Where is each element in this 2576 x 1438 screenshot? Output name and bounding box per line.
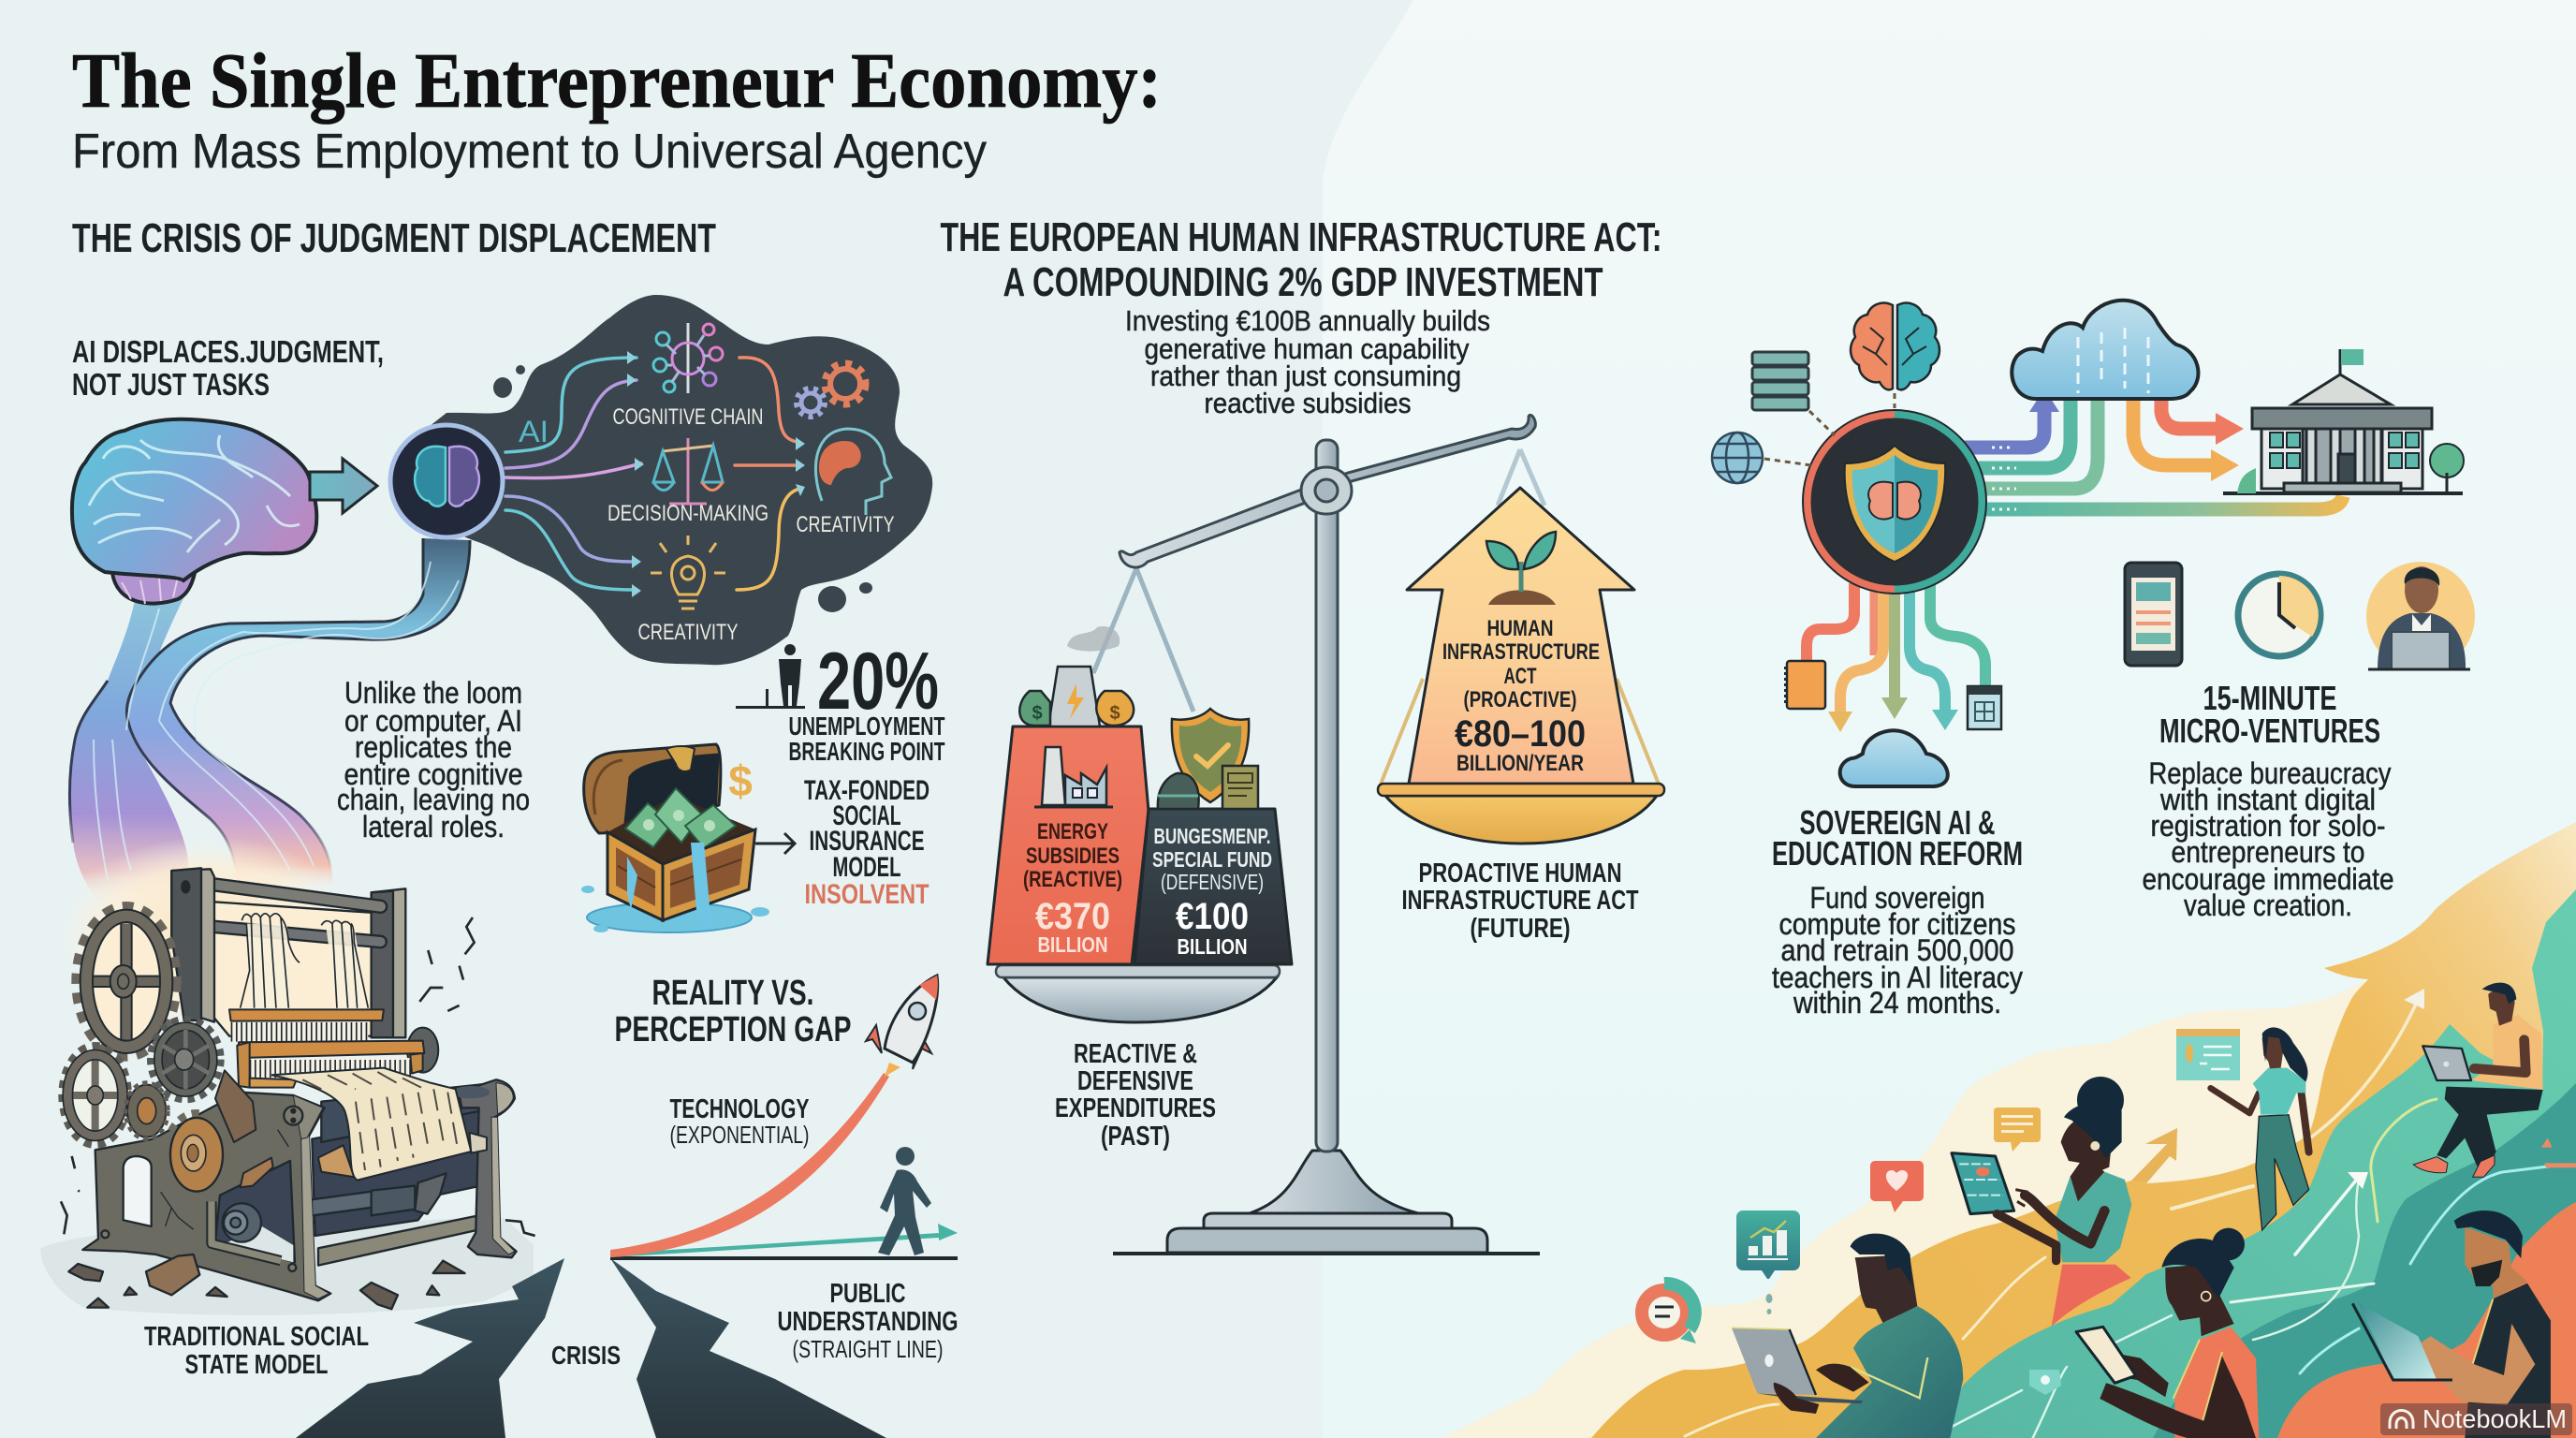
icon: light bulb xyxy=(651,536,725,609)
text: tax-funded social insurance model insolvent: TAX-FONDED xyxy=(804,775,929,806)
text: human infrastructure act: HUMAN xyxy=(1486,616,1554,641)
heading: 15-minute micro-ventures xyxy=(2159,679,2380,750)
hub circle with shield xyxy=(1803,410,1986,594)
left strings xyxy=(1093,568,1193,712)
label: proactive human infrastructure act: INFRASTRUCTURE ACT xyxy=(1402,886,1639,916)
text: human infrastructure act: €80–100 xyxy=(1455,713,1586,755)
cliff: left rock xyxy=(296,1258,564,1438)
section: 15-minute micro-ventures xyxy=(2125,562,2475,922)
icon: cloud bottom xyxy=(1840,730,1948,786)
connector lines xyxy=(505,351,805,597)
lower roller xyxy=(223,1203,261,1242)
text: sovereign AI body: within 24 months. xyxy=(1793,986,2001,1020)
reed and wood bars xyxy=(229,1009,438,1088)
icon: donut chat xyxy=(1642,1284,1696,1343)
heading: reality vs perception gap: PERCEPTION GAP xyxy=(614,1010,852,1049)
right leg xyxy=(459,1079,517,1257)
heading: 15-minute micro-ventures: MICRO-VENTURES xyxy=(2159,712,2380,750)
text: unlike the loom: replicates the xyxy=(355,730,512,764)
left pan xyxy=(996,965,1280,1022)
card: person badge xyxy=(2029,1370,2061,1395)
rear beam and under-cloth xyxy=(265,1083,496,1266)
heading: 15-minute micro-ventures: 15-MINUTE xyxy=(2203,679,2336,717)
person 2: woman with tablet xyxy=(1997,1077,2131,1327)
label: reactive defensive expenditures: (PAST) xyxy=(1101,1122,1170,1152)
icon: calculator xyxy=(1968,686,2001,729)
block: energy subsidies xyxy=(988,726,1149,964)
right pan xyxy=(1378,784,1664,844)
icon: cloud top xyxy=(2012,301,2198,399)
label: traditional social state model: STATE MODEL xyxy=(185,1350,328,1380)
heading: European Human Infrastructure Act: A COMPOUNDING 2% GDP INVESTMENT xyxy=(1003,259,1603,305)
label: reactive defensive expenditures: EXPENDITURES xyxy=(1055,1093,1216,1123)
scale pillar xyxy=(1316,440,1338,1152)
callout: AI displaces judgment: NOT JUST TASKS xyxy=(72,367,270,402)
icon: globe xyxy=(1712,433,1763,483)
text: sovereign AI body: compute for citizens xyxy=(1778,907,2016,941)
big gear xyxy=(77,907,176,1056)
text: micro-ventures body: Replace bureaucracy xyxy=(2149,756,2391,790)
dark blob: AI cognitive chain xyxy=(412,295,932,665)
text: energy subsidies: SUBSIDIES xyxy=(1026,844,1120,869)
text: energy subsidies: ENERGY xyxy=(1037,819,1108,844)
arrow heads xyxy=(2029,389,2244,481)
icon: factory xyxy=(1034,747,1113,807)
arrow: chest to model xyxy=(755,833,795,854)
icon: leaking treasure chest xyxy=(581,744,795,932)
text: public understanding: UNDERSTANDING xyxy=(777,1307,959,1337)
icon: leaking treasure chest: $ xyxy=(728,756,753,805)
icon: person at laptop xyxy=(2366,562,2475,670)
person 6: bearded man with laptop xyxy=(2352,1211,2551,1438)
text: decision-making: DECISION-MAKING xyxy=(607,501,768,526)
person 3: standing woman xyxy=(2211,1027,2309,1230)
text: cognitive chain: COGNITIVE CHAIN xyxy=(612,404,764,430)
rust chunks and cracks xyxy=(161,1070,288,1229)
callout: AI displaces judgment xyxy=(72,334,384,402)
cloth roller xyxy=(318,1086,490,1177)
balance scale xyxy=(988,415,1664,1254)
icon: sprout xyxy=(1486,532,1556,605)
heading: sovereign AI: EDUCATION REFORM xyxy=(1772,834,2023,873)
person 5: woman with phone xyxy=(2100,1228,2259,1438)
hill: cream xyxy=(1442,889,2576,1438)
intro text: investing 100B: generative human capability xyxy=(1144,332,1470,365)
text: unlike the loom: or computer, AI xyxy=(344,704,522,738)
text: energy subsidies: €370 xyxy=(1035,896,1110,937)
heading: European Human Infrastructure Act: THE EUROPEAN HUMAN INFRASTRUCTURE ACT: xyxy=(940,214,1662,260)
scale beam xyxy=(1120,415,1535,567)
text: unlike the loom: Unlike the loom xyxy=(344,676,522,710)
flow pipes to cloud and government building xyxy=(1956,379,2343,509)
icon: walking person xyxy=(878,1147,931,1255)
icon: servers xyxy=(1752,352,1808,410)
text: micro-ventures body: value creation. xyxy=(2184,888,2352,922)
text: tax-funded social insurance model insolvent: INSURANCE xyxy=(809,826,925,857)
middle gear xyxy=(151,1020,221,1099)
arrow heads xyxy=(2348,989,2424,1189)
title: The Single Entrepreneur Economy: xyxy=(72,37,1162,125)
label: traditional social state model xyxy=(144,1322,369,1380)
text: human infrastructure act: ACT xyxy=(1503,664,1537,689)
text: energy subsidies: (REACTIVE) xyxy=(1023,867,1122,892)
icon: brain xyxy=(72,419,316,604)
floating coral bits xyxy=(2541,1138,2576,1167)
text: human infrastructure act: BILLION/YEAR xyxy=(1456,751,1584,776)
people: laptop man and tablet woman xyxy=(1732,1077,2131,1438)
heading: sovereign AI: SOVEREIGN AI & xyxy=(1799,803,1996,842)
block: Bundeswehr special fund: (DEFENSIVE) xyxy=(1161,870,1264,894)
text: unlike the loom: entire cognitive xyxy=(344,757,522,791)
pipe dots xyxy=(1992,448,2016,509)
left lower gear xyxy=(63,1046,128,1145)
icon: head with brain xyxy=(815,429,891,515)
hill: yellow xyxy=(1591,822,2576,1438)
stat: 20% unemployment breaking point: 20% xyxy=(817,637,939,726)
growth lines xyxy=(1685,998,2555,1438)
node: AI brain xyxy=(390,425,503,537)
icon: balance scale xyxy=(653,438,723,504)
icon: network cognitive chain xyxy=(653,323,723,393)
card: chart xyxy=(1736,1211,1800,1314)
heading: European Human Infrastructure Act xyxy=(940,214,1662,305)
label: proactive human infrastructure act xyxy=(1402,858,1639,944)
cliff: right rock xyxy=(610,1258,886,1438)
icon: cooling tower and money bags: $ xyxy=(1032,703,1043,724)
stat: 20% unemployment breaking point: UNEMPLOYMENT xyxy=(788,712,945,741)
heading: reality vs perception gap: REALITY VS. xyxy=(651,974,814,1013)
label: traditional social state model: TRADITIONAL SOCIAL xyxy=(144,1322,369,1352)
icon: cooling tower and money bags xyxy=(1019,667,1134,726)
text: creativity bottom: CREATIVITY xyxy=(638,620,738,645)
diagram: sovereign AI flow xyxy=(1712,301,2464,1020)
text: tax-funded social insurance model insolvent: MODEL xyxy=(833,852,900,883)
text: micro-ventures body: encourage immediate xyxy=(2142,862,2394,896)
scale pivot xyxy=(1301,467,1352,514)
text: sovereign AI body: Fund sovereign xyxy=(1810,881,1984,915)
dashed connectors xyxy=(1764,393,1895,465)
heading: reality vs perception gap xyxy=(614,974,852,1049)
illustration: obsolete loom xyxy=(40,836,535,1315)
text: micro-ventures body: registration for solo- xyxy=(2151,809,2385,843)
glow behind loom xyxy=(53,836,365,1036)
text: sovereign AI body: teachers in AI literacy xyxy=(1772,961,2023,994)
icon: cooling tower and money bags: $ xyxy=(1109,703,1120,724)
label: proactive human infrastructure act: PROACTIVE HUMAN xyxy=(1419,858,1621,888)
block: Bundeswehr special fund: BUNGESMENP. xyxy=(1153,824,1271,848)
ribbon: neural stream from brain and node to the loom xyxy=(69,538,470,906)
text: micro-ventures body: with instant digital xyxy=(2159,783,2376,816)
text: technology exponential: TECHNOLOGY xyxy=(670,1094,809,1124)
text: tax-funded social insurance model insolvent: INSOLVENT xyxy=(805,879,929,910)
card: heart xyxy=(1870,1161,1924,1212)
gold strings xyxy=(1380,679,1660,786)
text: sovereign AI body: and retrain 500,000 xyxy=(1780,933,2014,967)
scale base xyxy=(1113,1151,1540,1254)
label: reactive defensive expenditures: REACTIVE & xyxy=(1074,1039,1197,1069)
text: technology exponential xyxy=(670,1094,809,1149)
right strings xyxy=(1498,449,1544,506)
icon: gears xyxy=(797,363,866,417)
debris xyxy=(68,1255,465,1309)
crack marks xyxy=(61,917,535,1236)
intro text: investing 100B: Investing €100B annually builds xyxy=(1125,304,1490,337)
text: technology exponential: (EXPONENTIAL) xyxy=(670,1121,809,1149)
pipes downward xyxy=(1807,583,1985,716)
main front plate xyxy=(82,1093,330,1300)
heading: sovereign AI xyxy=(1772,803,2023,873)
icon: brain top xyxy=(1851,303,1939,389)
arrow heads downward xyxy=(1828,697,1958,732)
text: micro-ventures body: entrepreneurs to xyxy=(2172,835,2364,869)
block: Bundeswehr special fund: SPECIAL FUND xyxy=(1152,847,1272,872)
text: human infrastructure act xyxy=(1442,616,1600,776)
callout: AI displaces judgment: AI DISPLACES.JUDGMENT, xyxy=(72,334,384,369)
text: unlike the loom: lateral roles. xyxy=(362,810,505,844)
arrow: brain to AI node xyxy=(310,459,377,513)
person 1: man with laptop xyxy=(1732,1234,1963,1438)
text: tax-funded social insurance model insolvent xyxy=(804,775,929,910)
intro text: investing 100B: reactive subsidies xyxy=(1204,387,1412,419)
text: public understanding: (STRAIGHT LINE) xyxy=(792,1335,944,1363)
label: proactive human infrastructure act: (FUTURE) xyxy=(1470,914,1571,944)
text: unlike the loom: chain, leaving no xyxy=(337,783,530,816)
heading: crisis of judgment displacement: THE CRISIS OF JUDGMENT DISPLACEMENT xyxy=(72,215,716,261)
intro text: investing 100B xyxy=(1125,304,1490,419)
phone xyxy=(2076,1327,2136,1383)
people: right group xyxy=(2076,983,2576,1438)
block: Bundeswehr special fund: €100 xyxy=(1176,896,1249,937)
text: human infrastructure act: (PROACTIVE) xyxy=(1464,687,1576,712)
text: micro-ventures body xyxy=(2142,756,2394,922)
block: Bundeswehr special fund: BILLION xyxy=(1178,934,1247,959)
text: public understanding: PUBLIC xyxy=(829,1279,906,1309)
text: creativity right: CREATIVITY xyxy=(796,512,895,537)
arrow block: human infrastructure act xyxy=(1407,488,1634,784)
text: energy subsidies: BILLION xyxy=(1037,932,1108,957)
cloth xyxy=(271,1068,471,1181)
text: unlike the loom xyxy=(337,676,530,844)
gears xyxy=(63,907,227,1196)
card: web window xyxy=(2176,1029,2240,1080)
illustration: rising hills with entrepreneurs xyxy=(1442,822,2576,1438)
hill: dark teal xyxy=(2153,1083,2576,1438)
intro text: investing 100B: rather than just consuming xyxy=(1150,360,1461,392)
hill: coral xyxy=(2277,1202,2576,1438)
text: sovereign AI body xyxy=(1772,881,2023,1020)
yellow arrow xyxy=(2131,1128,2177,1183)
tablet xyxy=(1952,1153,2014,1214)
text: energy subsidies xyxy=(1023,819,1122,957)
rust gear xyxy=(166,1113,227,1196)
person 4: seated man with laptop xyxy=(2413,983,2543,1177)
text: human infrastructure act: INFRASTRUCTURE xyxy=(1442,639,1600,665)
stat: 20% unemployment breaking point: BREAKING POINT xyxy=(788,737,945,766)
hill: teal xyxy=(1950,889,2576,1438)
ground xyxy=(40,1217,534,1315)
text: public understanding xyxy=(777,1279,959,1363)
icon: notebook logo xyxy=(2390,1410,2413,1429)
icon: government building xyxy=(2223,349,2464,493)
title xyxy=(72,37,1162,179)
icon: rocket xyxy=(866,976,938,1077)
title: From Mass Employment to Universal Agency xyxy=(72,125,987,179)
icon: shield helmet and radio xyxy=(1158,709,1258,809)
NotebookLM badge: NotebookLM xyxy=(2422,1404,2567,1433)
card: yellow chat xyxy=(1994,1108,2041,1152)
stat: 20% unemployment breaking point xyxy=(736,637,945,766)
smoke xyxy=(1067,626,1120,652)
warp threads xyxy=(241,914,368,1008)
icon: person on step xyxy=(736,644,805,709)
small brown gear xyxy=(125,1083,168,1139)
chart: exponential technology vs straight-line understanding xyxy=(610,976,959,1363)
AI label: AI xyxy=(519,415,549,448)
icon: notebook xyxy=(1786,661,1825,709)
icon: clock xyxy=(2238,574,2320,656)
back frame xyxy=(171,868,405,1037)
block: Bundeswehr special fund xyxy=(1134,809,1292,964)
label: crisis: CRISIS xyxy=(551,1341,621,1370)
icon: phone xyxy=(2125,563,2182,666)
text: tax-funded social insurance model insolvent: SOCIAL xyxy=(833,800,900,831)
label: reactive defensive expenditures: DEFENSIVE xyxy=(1077,1066,1193,1096)
label: reactive defensive expenditures xyxy=(1055,1039,1216,1152)
